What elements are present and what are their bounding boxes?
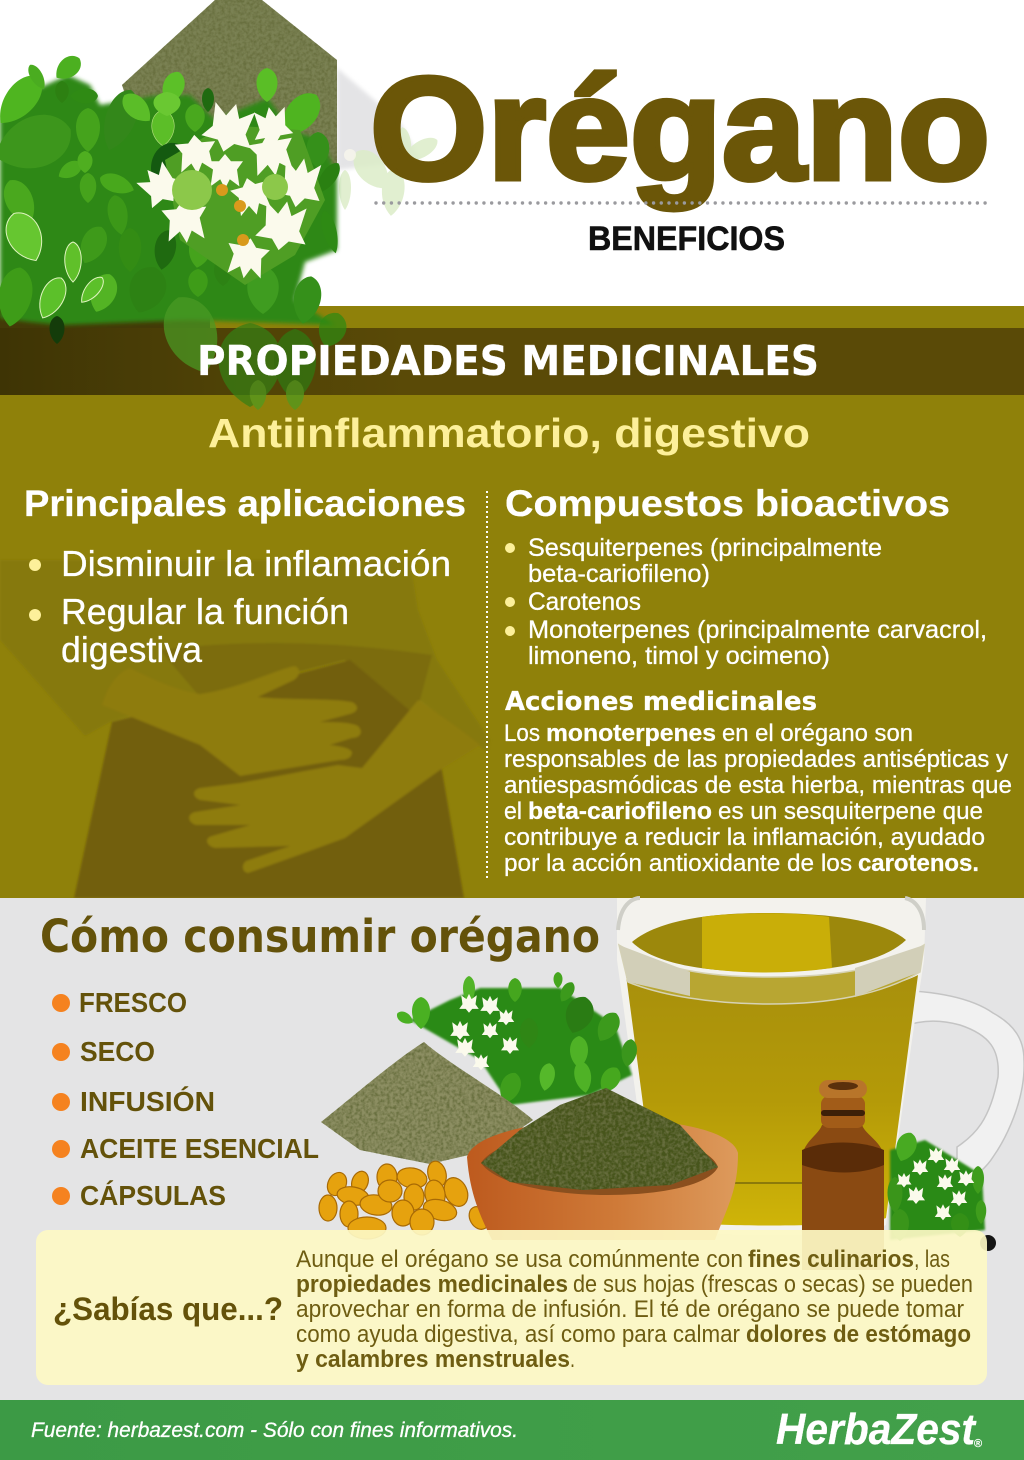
bullet: monoterpenes: limoneno, timol y ocimeno) [528,642,830,670]
logo: HerbaZest: HerbaZest [776,1405,977,1454]
footer [0,1400,1024,1460]
paragraph: medicinal actions: responsables de las propiedades antisépticas y [504,746,1008,773]
tea bottom line [680,1182,870,1184]
tea surface [632,913,906,972]
callout text [296,1246,973,1373]
icon: oregano plant with flowers [0,51,356,410]
callout text: propiedades medicinales [296,1271,568,1298]
heading: medicinal actions: Acciones medicinales [505,687,817,717]
dotted divider under title [376,201,986,205]
item: fresh: FRESCO [79,987,187,1018]
paragraph: medicinal actions: Los [504,720,540,747]
silhouette: waist folds [160,643,432,730]
block: medicinal actions [504,687,1012,877]
bullet: carotenes: Carotenos [528,588,641,616]
callout text: de sus hojas (frescas o secas) se pueden [573,1271,973,1298]
paragraph: medicinal actions: antiespasmódicas de esta hierba, mientras que [504,772,1012,799]
heading: bioactive compounds: Compuestos bioactivos [505,483,950,524]
bullet: regulate digestion: digestiva [61,629,203,670]
paragraph: medicinal actions: beta-cariofileno [528,798,712,825]
heading: medicinal properties: PROPIEDADES MEDICINALES [197,337,819,385]
column: bioactive compounds [505,483,987,670]
callout heading: ¿Sabías que...? [53,1291,283,1327]
image: tea mug [617,898,1024,1235]
paragraph: medicinal actions: el [504,798,522,825]
subheading: properties list: Antiinflammatorio, digestivo [208,410,810,456]
heading: main applications: Principales aplicaciones [24,483,466,524]
item: infusion: INFUSIÓN [80,1086,215,1117]
callout: did you know [36,1230,987,1385]
callout text: y calambres menstruales [296,1346,570,1373]
item: capsules: CÁPSULAS [80,1180,226,1211]
image: dried oregano pile [321,1042,533,1164]
image: wooden bowl with herbs [467,1088,738,1240]
bullet: sesquiterpenes: Sesquiterpenes (principalmente [528,534,882,562]
panel: medicinal properties [0,306,1024,898]
heading: how to consume oregano: Cómo consumir orégano [40,910,600,963]
title: Orégano [370,47,990,210]
callout text: como ayuda digestiva, así como para calmar [296,1321,740,1348]
image: essential oil bottle [802,1080,884,1270]
paragraph: medicinal actions: monoterpenes [546,720,716,747]
bullet: monoterpenes [505,616,987,670]
band: section heading background [0,306,1024,395]
silhouette: lower hand [189,700,480,873]
lower translucent leaves [154,289,351,410]
logo: HerbaZest: ® [974,1438,982,1450]
callout text: . [570,1346,575,1373]
callout text: fines culinarios [748,1246,914,1273]
upper and left leaves [0,51,344,344]
subtitle: BENEFICIOS [588,220,785,258]
silhouette: skirt [74,660,464,898]
callout text: dolores de estómago [746,1321,971,1348]
panel: how to consume [0,898,1024,1400]
callout text: , las [914,1246,950,1273]
paragraph: medicinal actions: contribuye a reducir la inflamación, ayudado [504,824,985,851]
list: forms of consumption [52,987,319,1211]
bullet: sesquiterpenes: beta-cariofileno) [528,560,710,588]
item: dried: SECO [80,1036,155,1067]
dried oregano pile behind title [122,0,441,217]
silhouette: shirt [0,560,490,752]
image: small oregano sprig [887,1130,996,1251]
silhouette: upper hand [102,666,361,776]
mug glass [617,898,926,1235]
column divider [486,491,488,878]
paragraph: medicinal actions [504,720,1012,877]
glass rim band [619,945,924,1004]
paragraph: medicinal actions: carotenos. [858,850,979,877]
bullet: sesquiterpenes [505,534,882,588]
bullet: monoterpenes: Monoterpenes (principalmente carvacrol, [528,616,987,644]
column: main applications [24,483,466,670]
paragraph: medicinal actions: es un sesquiterpene que [718,798,983,825]
image: oil capsules [319,1159,493,1239]
tea body [626,975,918,1226]
callout text: Aunque el orégano se usa comúnmente con [296,1246,743,1273]
bullet: reduce inflammation: Disminuir la inflamación [61,543,451,584]
bullet: regulate digestion: Regular la función [61,591,349,632]
mug handle [879,990,1024,1190]
item: dried [52,1036,155,1067]
bullet: regulate digestion [29,591,349,670]
source note: Fuente: herbazest.com - Sólo con fines informativos. [31,1419,518,1442]
item: essential oil: ACEITE ESENCIAL [80,1133,319,1164]
paragraph: medicinal actions: por la acción antioxidante de los [504,850,852,877]
image: oregano sprig with flowers [395,972,639,1106]
flower cluster [131,97,356,285]
callout text: aprovechar en forma de infusión. El té de orégano se puede tomar [296,1296,964,1323]
paragraph: medicinal actions: en el orégano son [722,720,913,747]
